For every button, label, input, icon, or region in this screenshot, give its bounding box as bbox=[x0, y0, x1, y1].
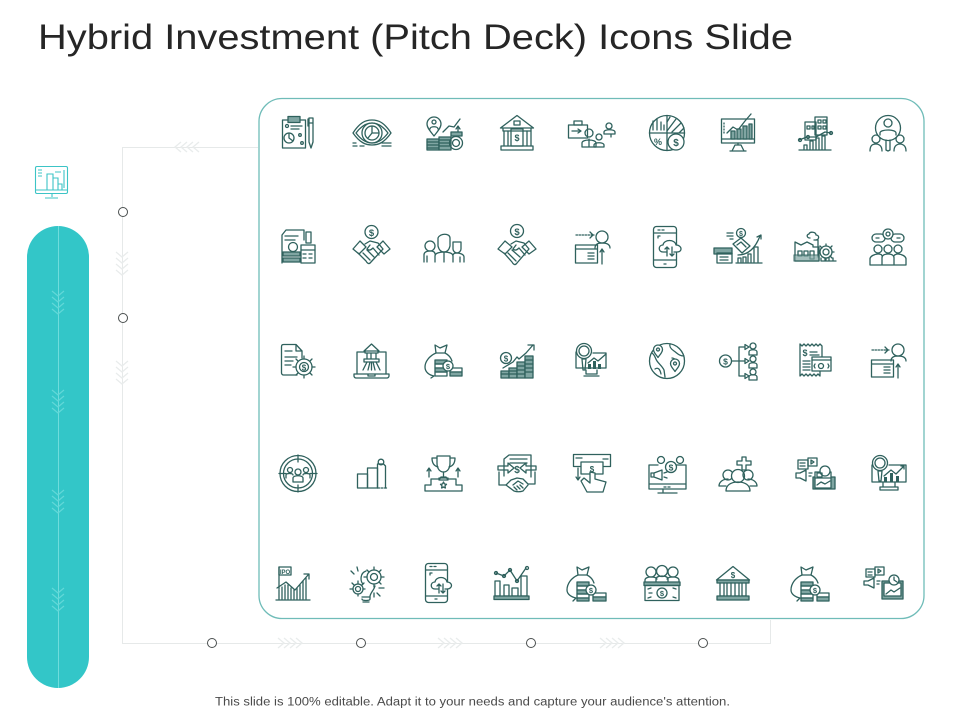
icon: magnifier on chart monitor bbox=[872, 456, 906, 490]
icon: trophy on podium bbox=[425, 456, 462, 491]
icon: person with browser window bbox=[576, 231, 610, 264]
icon: team behind banknote desk: $ bbox=[660, 589, 665, 598]
connector nodes bbox=[118, 208, 708, 648]
icon: dollar distributed to people: $ bbox=[723, 356, 728, 366]
icon: IPO chart: IPO bbox=[280, 570, 290, 576]
panel: icon frame bbox=[259, 98, 924, 618]
icon: contract and handshake bbox=[498, 455, 536, 492]
icon: pie chart with dollar: % bbox=[654, 137, 662, 147]
icon: clipboard and pen bbox=[282, 116, 313, 148]
icon: money bag with coins bbox=[791, 567, 829, 601]
icon: phone with cloud bbox=[654, 226, 681, 268]
icon: document, coins and calculator bbox=[282, 230, 315, 263]
icon: deal and growth chart: $ bbox=[739, 231, 743, 238]
icon: classical bank: $ bbox=[731, 571, 736, 580]
icon: rising stacked coins: $ bbox=[504, 354, 509, 364]
icon: pie chart with dollar bbox=[650, 116, 684, 150]
icon: person with browser window bbox=[872, 344, 906, 378]
icon: contract and handshake: $ bbox=[514, 465, 520, 476]
icon: rising stacked coins bbox=[500, 345, 534, 378]
icon: bank with phone: $ bbox=[514, 133, 520, 143]
icon: teal monitor with bar chart bbox=[36, 166, 68, 198]
icon: IPO chart bbox=[276, 567, 310, 600]
icon: magnifier on chart monitor bbox=[576, 344, 606, 376]
icon: monitor with megaphone and coins bbox=[649, 456, 686, 493]
icon: eye with chart bbox=[353, 120, 391, 146]
icon: media marketing bbox=[796, 458, 835, 489]
icon: deal and growth chart bbox=[714, 228, 762, 263]
icon: receipt with banknote bbox=[800, 344, 831, 376]
grey connector frame bbox=[116, 142, 770, 648]
icon: media marketing bbox=[864, 567, 903, 599]
pill chevrons bbox=[52, 291, 64, 611]
icon: briefcase and team bbox=[568, 121, 615, 147]
icon: location, coins and target bbox=[427, 117, 462, 150]
icon: team in target bbox=[279, 455, 317, 492]
icon: factory and gear bbox=[794, 232, 836, 261]
icon: team with plus bbox=[719, 457, 757, 491]
icon: handshake with dollar bbox=[498, 224, 536, 265]
icon: receipt with banknote: $ bbox=[802, 348, 808, 358]
icon: laptop with bank bbox=[354, 344, 389, 378]
icon: money bag with coins: $ bbox=[446, 362, 451, 371]
icon: document with dollar gear bbox=[282, 344, 315, 378]
icon: dollar distributed to people bbox=[720, 343, 757, 380]
icon: money bag with coins bbox=[567, 567, 606, 601]
icon: handshake with dollar: $ bbox=[514, 227, 520, 238]
icon: money bag with coins: $ bbox=[813, 586, 818, 595]
teal pill bbox=[27, 226, 89, 688]
icon: stepped bars with person bbox=[358, 459, 386, 488]
icon: hand pressing cash machine bbox=[574, 454, 610, 492]
icon: business team bbox=[424, 234, 464, 262]
icon: globe with pins bbox=[650, 344, 684, 378]
icon: bar and line chart bbox=[494, 566, 529, 600]
icon: classical bank bbox=[716, 566, 750, 600]
connector chevrons bbox=[116, 142, 624, 648]
icon: pie chart with dollar: $ bbox=[673, 138, 679, 149]
icon: team behind banknote desk bbox=[644, 566, 680, 600]
icon: bank with phone bbox=[500, 116, 534, 150]
icon: buildings with bar chart bbox=[798, 117, 832, 150]
icon: handshake with dollar: $ bbox=[369, 228, 375, 239]
icon: monitor with rising chart bbox=[722, 114, 754, 151]
icon: money bag with coins: $ bbox=[589, 586, 594, 595]
icon: phone with cloud bbox=[426, 564, 452, 602]
footer note: This slide is 100% editable. Adapt it to your needs and capture your audience's attention. bbox=[215, 696, 730, 708]
icon: magnified person and team bbox=[870, 116, 906, 151]
icon: document with dollar gear: $ bbox=[302, 364, 307, 372]
title: Hybrid Investment (Pitch Deck) Icons Slide bbox=[38, 18, 793, 57]
icon: team with gear and speech bbox=[870, 229, 906, 265]
icon: money bag with coins bbox=[425, 345, 462, 378]
icon: hand pressing cash machine: $ bbox=[590, 465, 595, 474]
icon: handshake with dollar bbox=[353, 226, 390, 264]
icon: bulb with gears bbox=[350, 567, 384, 602]
icon: monitor with megaphone and coins: $ bbox=[669, 462, 674, 472]
